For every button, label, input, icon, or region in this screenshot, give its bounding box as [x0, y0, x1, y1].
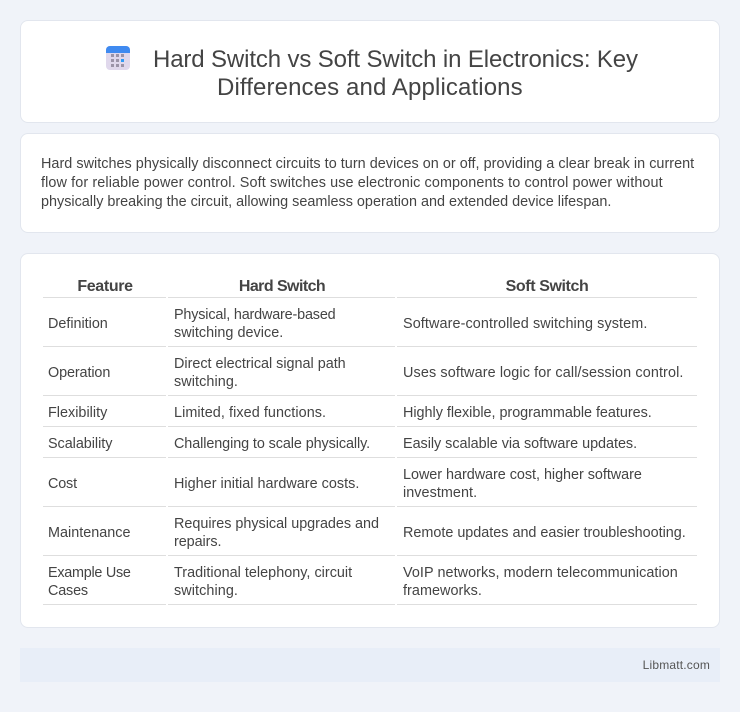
row: definition	[43, 307, 697, 347]
text block: introduction: physically breaking the circuit, allowing seamless operation and extended device lifespan.	[41, 194, 611, 210]
row: maintenance	[43, 516, 697, 556]
row: definition: Software-controlled switching system.	[403, 316, 647, 332]
row: scalability	[43, 436, 697, 458]
row: operation	[43, 356, 697, 396]
row: cost: Cost	[48, 476, 77, 492]
row: maintenance: Maintenance	[48, 525, 131, 541]
row: example use cases: VoIP networks, modern telecommunication	[403, 565, 678, 581]
row: cost	[43, 467, 697, 507]
row: flexibility	[43, 405, 697, 427]
row: scalability: Easily scalable via software updates.	[403, 436, 637, 452]
row: operation: Direct electrical signal path	[174, 356, 346, 372]
panel: title card	[20, 20, 720, 123]
title: Differences and Applications	[217, 74, 523, 101]
row: definition: Physical, hardware-based	[174, 307, 336, 323]
text block: introduction	[41, 156, 694, 210]
panel: comparison table	[20, 253, 720, 628]
table header: Feature	[77, 278, 133, 295]
panel: introduction	[20, 133, 720, 233]
row: example use cases: switching.	[174, 583, 238, 599]
text block: introduction: flow for reliable power control. Soft switches use electronic components to control power without	[41, 175, 663, 191]
row: maintenance: Requires physical upgrades and	[174, 516, 379, 532]
row: operation: switching.	[174, 374, 238, 390]
row: definition: switching device.	[174, 325, 283, 341]
row: example use cases: Traditional telephony, circuit	[174, 565, 352, 581]
row: flexibility: Limited, fixed functions.	[174, 405, 326, 421]
table header	[43, 278, 697, 298]
row: example use cases	[43, 565, 697, 605]
row: cost: investment.	[403, 485, 477, 501]
row: cost: Lower hardware cost, higher software	[403, 467, 642, 483]
row: flexibility: Highly flexible, programmable features.	[403, 405, 652, 421]
row: flexibility: Flexibility	[48, 405, 107, 421]
row: scalability: Scalability	[48, 436, 112, 452]
row: example use cases: Cases	[48, 583, 88, 599]
table header: Hard Switch	[239, 278, 325, 295]
footer bar	[20, 648, 720, 682]
row: definition: Definition	[48, 316, 108, 332]
table header: Soft Switch	[506, 278, 588, 295]
row: maintenance: Remote updates and easier troubleshooting.	[403, 525, 686, 541]
row: operation: Uses software logic for call/session control.	[403, 365, 684, 381]
title	[153, 46, 638, 101]
text block: introduction: Hard switches physically disconnect circuits to turn devices on or off, providing a clear break in current	[41, 156, 694, 172]
row: maintenance: repairs.	[174, 534, 221, 550]
icon: calendar	[106, 46, 130, 70]
row: operation: Operation	[48, 365, 110, 381]
row: scalability: Challenging to scale physically.	[174, 436, 370, 452]
title: Hard Switch vs Soft Switch in Electronics: Key	[153, 46, 638, 73]
footer text: Libmatt.com	[643, 658, 710, 672]
row: example use cases: Example Use	[48, 565, 131, 581]
row: cost: Higher initial hardware costs.	[174, 476, 359, 492]
row: example use cases: frameworks.	[403, 583, 482, 599]
